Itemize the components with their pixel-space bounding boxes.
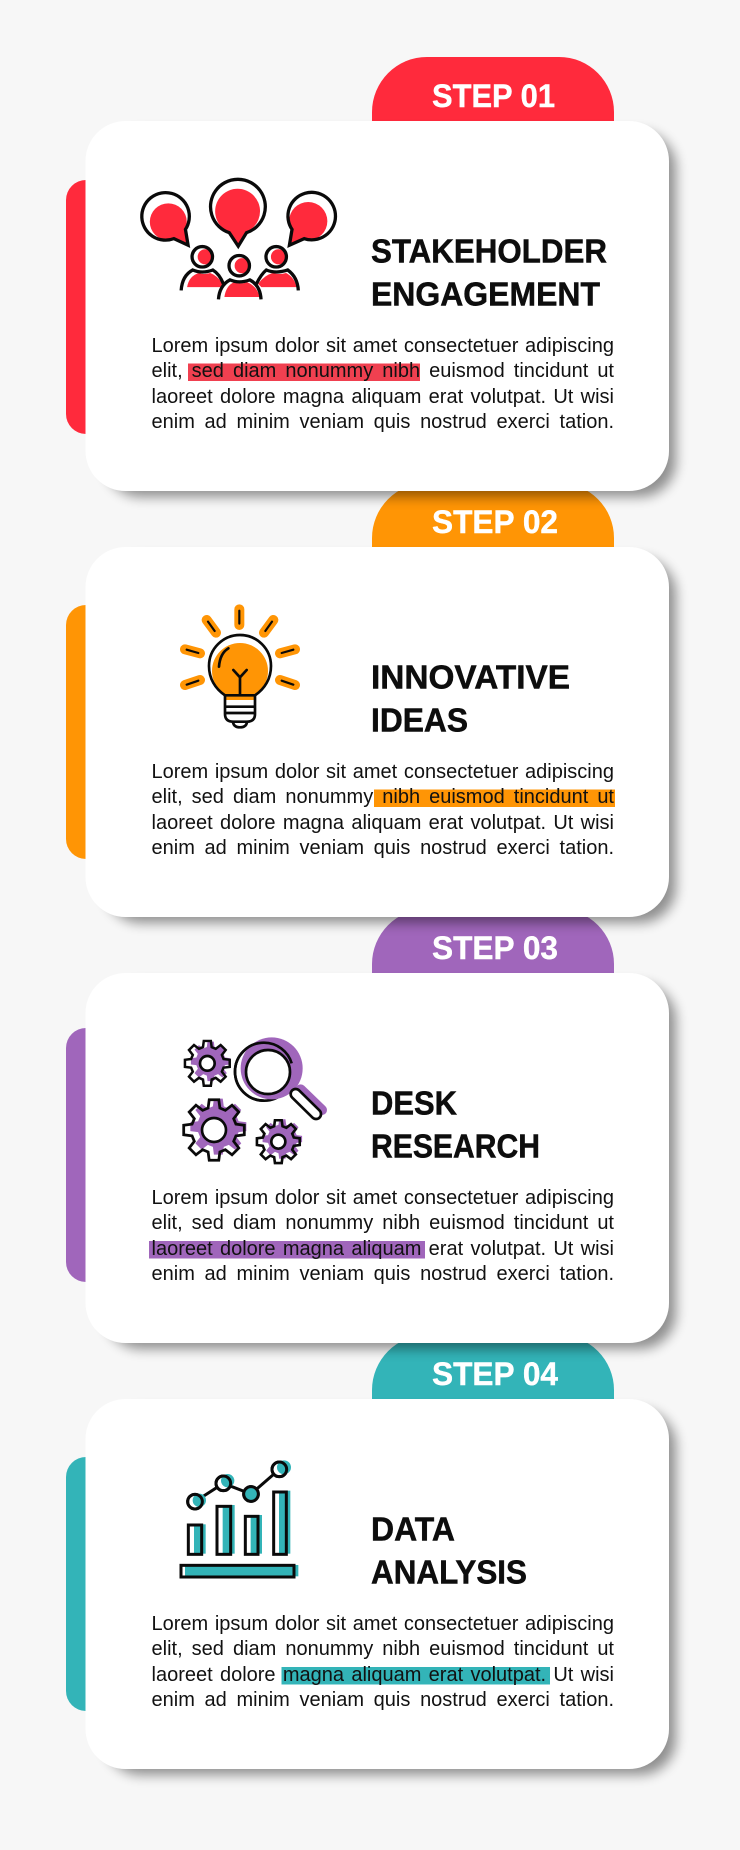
heading: DESK	[371, 1086, 457, 1122]
card background	[86, 121, 669, 491]
body text	[152, 334, 614, 438]
card background	[86, 547, 669, 917]
text highlight	[149, 1241, 425, 1258]
body text: Lorem ipsum dolor sit amet consectetuer adipiscing	[152, 1186, 614, 1208]
heading: ENGAGEMENT	[371, 276, 600, 314]
heading: INNOVATIVE	[371, 660, 570, 696]
body text	[152, 1186, 614, 1290]
step tab: step 04	[372, 1335, 614, 1399]
body text: elit, sed diam nonummy nibh euismod tincidunt ut	[152, 1638, 614, 1660]
body text	[152, 760, 614, 864]
text highlight	[374, 790, 615, 807]
panel: step 04 data analysis	[66, 1335, 676, 1775]
body text: laoreet dolore magna aliquam erat volutpat. Ut wisi	[152, 386, 614, 408]
step tab: step 01	[372, 57, 614, 121]
top gear	[185, 1041, 230, 1086]
body text: Lorem ipsum dolor sit amet consectetuer adipiscing	[152, 334, 614, 356]
icon: gears and magnifier	[184, 1037, 322, 1163]
card background	[86, 1399, 669, 1769]
body text: laoreet dolore magna aliquam erat volutpat. Ut wisi	[152, 1664, 614, 1686]
body text: Lorem ipsum dolor sit amet consectetuer adipiscing	[152, 1612, 614, 1634]
step tab: step 01: STEP 01	[432, 78, 555, 114]
body text: laoreet dolore magna aliquam erat volutpat. Ut wisi	[152, 1238, 614, 1260]
heading	[371, 660, 570, 740]
heading	[371, 234, 607, 314]
side accent bar	[66, 180, 106, 434]
step tab: step 04: STEP 04	[432, 1356, 558, 1392]
large gear	[184, 1099, 246, 1160]
body text: enim ad minim veniam quis nostrud exerci tation.	[152, 837, 614, 859]
body text: enim ad minim veniam quis nostrud exerci tation.	[152, 1263, 614, 1285]
heading	[371, 1512, 527, 1592]
body text: elit, sed diam nonummy nibh euismod tincidunt ut	[152, 786, 614, 808]
body text: Lorem ipsum dolor sit amet consectetuer adipiscing	[152, 760, 614, 782]
step tab: step 02: STEP 02	[432, 504, 558, 540]
card shadow	[105, 1410, 676, 1775]
icon: bar chart with trend line	[181, 1460, 298, 1577]
heading: STAKEHOLDER	[371, 234, 607, 270]
body text: enim ad minim veniam quis nostrud exerci tation.	[152, 1689, 614, 1711]
body text	[152, 1612, 614, 1716]
heading: RESEARCH	[371, 1128, 540, 1166]
card shadow	[105, 558, 676, 923]
heading: IDEAS	[371, 702, 468, 740]
body text: laoreet dolore magna aliquam erat volutpat. Ut wisi	[152, 812, 614, 834]
step tab: step 02	[372, 483, 614, 547]
card shadow	[105, 984, 676, 1349]
step tab: step 03	[372, 909, 614, 973]
panel: step 01 stakeholder engagement	[66, 57, 676, 497]
body text: elit, sed diam nonummy nibh euismod tincidunt ut	[152, 360, 614, 382]
heading: DATA	[371, 1512, 455, 1548]
card background	[86, 973, 669, 1343]
step tab: step 03: STEP 03	[432, 930, 558, 966]
panel: step 02 innovative ideas	[66, 483, 676, 923]
heading	[371, 1086, 540, 1166]
magnifier	[235, 1037, 322, 1114]
text highlight	[282, 1667, 550, 1684]
heading: ANALYSIS	[371, 1554, 527, 1592]
body text: elit, sed diam nonummy nibh euismod tincidunt ut	[152, 1212, 614, 1234]
side accent bar	[66, 1028, 106, 1282]
side accent bar	[66, 605, 106, 859]
text highlight	[188, 364, 420, 381]
icon: light bulb	[185, 609, 295, 727]
side accent bar	[66, 1457, 106, 1711]
small gear	[257, 1119, 302, 1163]
icon: people with speech bubbles	[142, 179, 335, 299]
card shadow	[105, 132, 676, 497]
body text: enim ad minim veniam quis nostrud exerci tation.	[152, 411, 614, 433]
panel: step 03 desk research	[66, 909, 676, 1349]
